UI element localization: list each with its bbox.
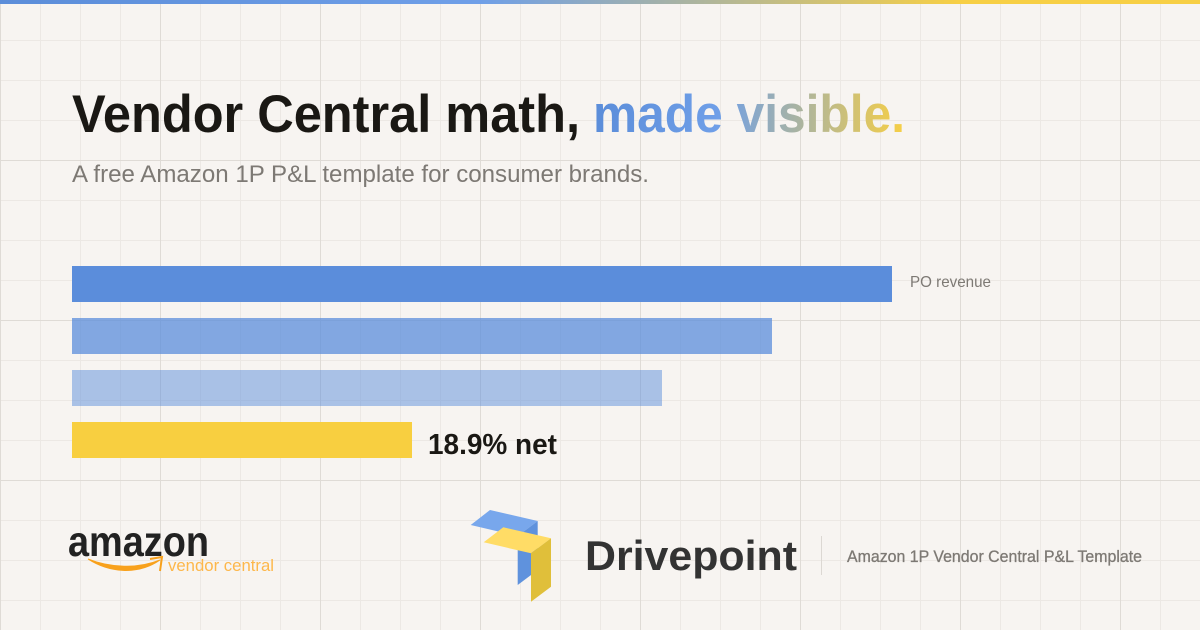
bar: second tier — [72, 318, 772, 354]
label: net margin: 18.9% net — [428, 429, 557, 461]
title: Vendor Central math, — [72, 85, 580, 144]
subtitle: A free Amazon 1P P&L template for consumer brands. — [72, 161, 649, 188]
label: PO revenue: PO revenue — [910, 274, 991, 291]
title: made visible. — [593, 85, 905, 144]
top gradient bar — [0, 0, 1200, 4]
bar: PO revenue — [72, 266, 892, 302]
logo: Drivepoint mark — [471, 510, 551, 602]
divider — [821, 536, 822, 575]
bar: third tier — [72, 370, 662, 406]
title — [72, 85, 905, 144]
icon: amazon smile — [88, 559, 160, 570]
logo: Amazon Vendor Central — [68, 518, 274, 575]
Drivepoint wordmark: Drivepoint — [585, 532, 797, 579]
template caption: Amazon 1P Vendor Central P&L Template — [847, 548, 1142, 566]
vendor central text: vendor central — [168, 556, 274, 575]
bar: net — [72, 422, 412, 458]
bar chart — [72, 266, 991, 461]
amazon wordmark: amazon — [68, 518, 209, 566]
